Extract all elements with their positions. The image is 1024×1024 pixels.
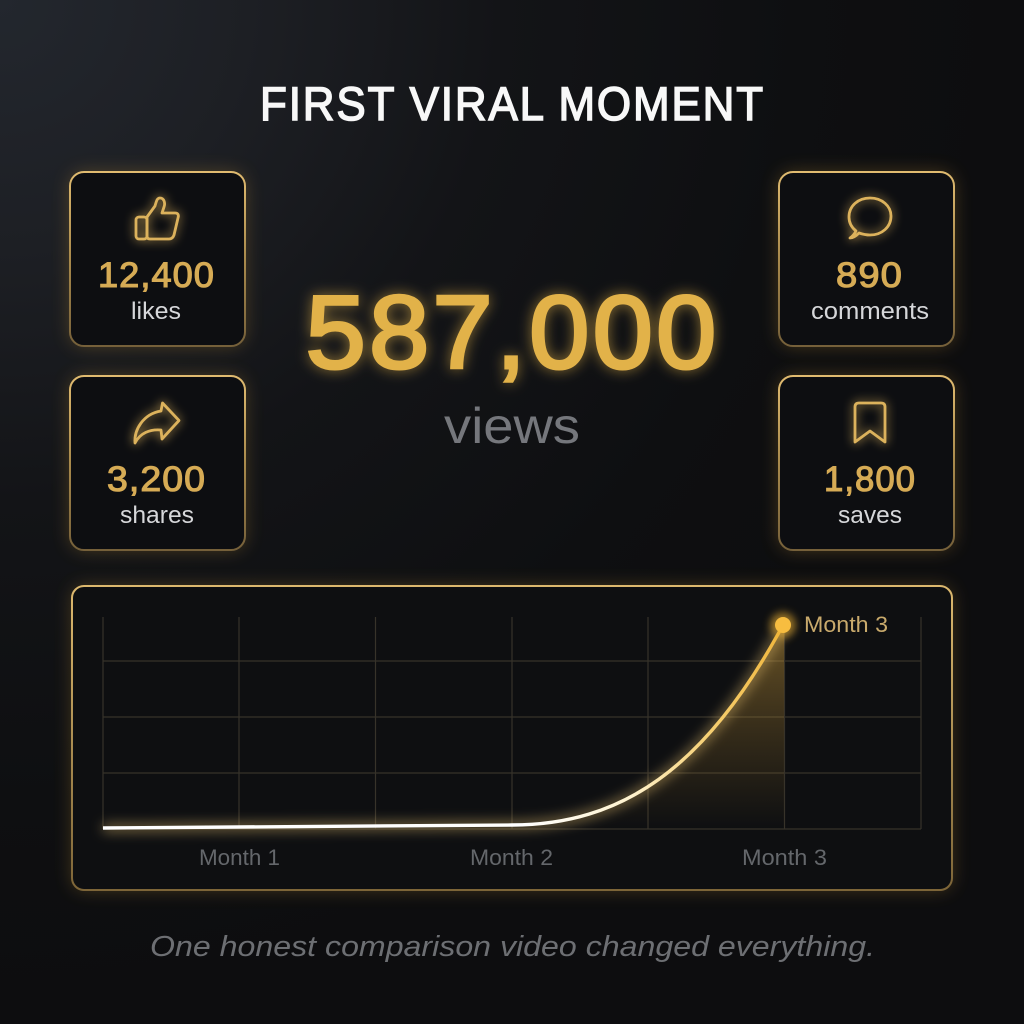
saves value: 1,800 [824, 460, 916, 499]
tagline: One honest comparison video changed everything. [150, 931, 875, 963]
peak label: Month 3 [804, 612, 888, 637]
panel: comments stat card [779, 172, 954, 346]
shares value: 3,200 [107, 460, 206, 499]
x-axis labels: Month 1 [199, 845, 280, 870]
icon: bookmark [855, 403, 885, 442]
shares label: shares [120, 502, 194, 529]
icon: speech bubble [849, 198, 891, 238]
curve glow [103, 625, 783, 828]
chart grid [103, 617, 921, 829]
views label: views [444, 398, 580, 454]
saves label: saves [838, 502, 902, 529]
icon: share arrow [135, 403, 179, 443]
panel: growth chart [72, 586, 952, 890]
x-axis labels [199, 845, 827, 870]
headline views number: 587,000 [306, 275, 720, 391]
comments label: comments [811, 298, 929, 325]
area under curve [512, 625, 784, 829]
peak marker [770, 612, 796, 638]
likes label: likes [131, 298, 181, 325]
x-axis labels: Month 2 [470, 845, 553, 870]
growth curve [103, 625, 783, 828]
likes value: 12,400 [98, 256, 215, 295]
panel: likes stat card [70, 172, 245, 346]
panel: shares stat card [70, 376, 245, 550]
panel: saves stat card [779, 376, 954, 550]
comments value: 890 [836, 256, 903, 295]
title: FIRST VIRAL MOMENT [260, 77, 765, 130]
x-axis labels: Month 3 [742, 845, 827, 870]
icon: thumbs up [136, 198, 178, 239]
